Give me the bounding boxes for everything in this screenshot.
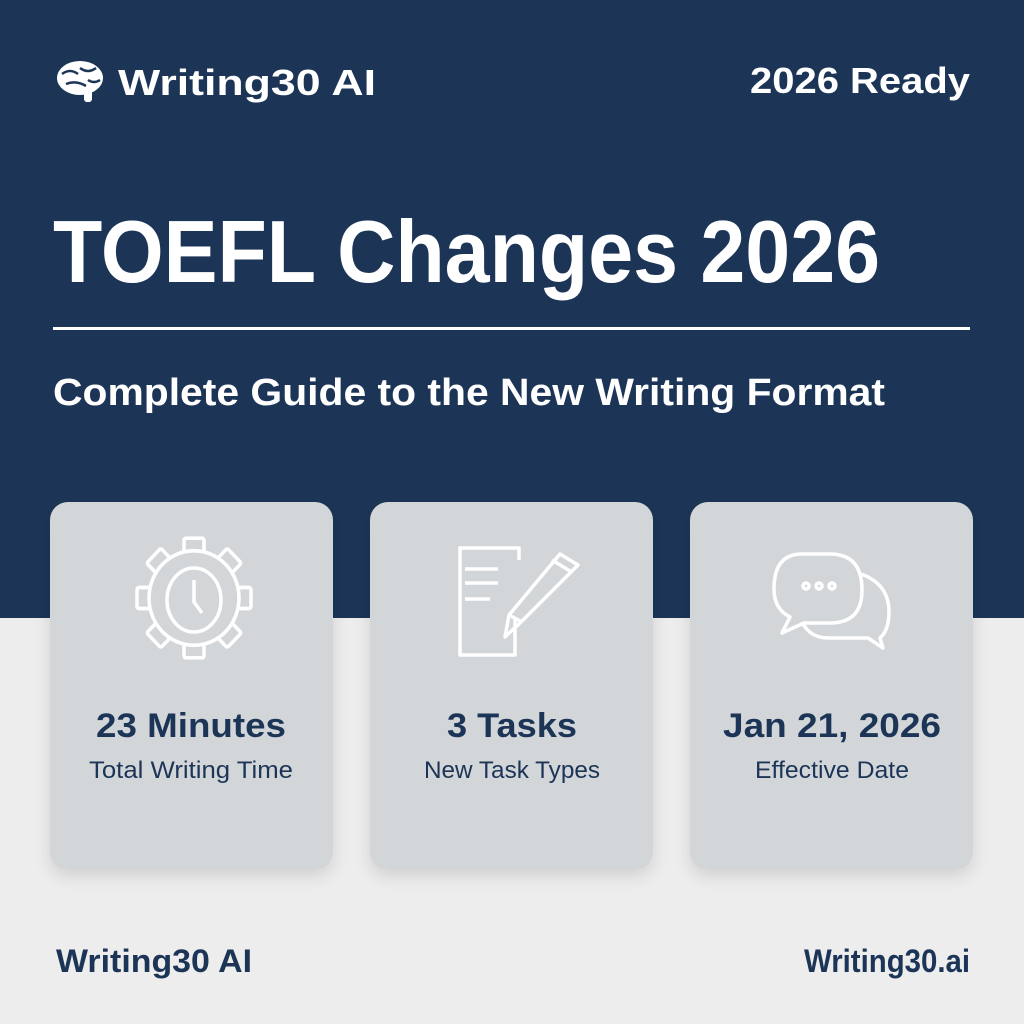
card: 3 tasks [370,502,653,870]
label: Total Writing Time [89,757,293,784]
logo [57,61,376,103]
title: TOEFL Changes 2026 [53,202,880,301]
subtitle: Complete Guide to the New Writing Format [53,372,885,414]
brand name: Writing30 AI [118,62,376,103]
stat: 23 Minutes [96,707,286,745]
icon: chat bubbles [774,554,889,648]
badge: 2026 Ready: 2026 Ready [750,60,970,101]
stat: Jan 21, 2026 [723,707,941,745]
footer brand: Writing30 AI [56,943,252,979]
icon: brain [57,61,103,102]
icon: gear clock [137,538,251,658]
icon: document with pencil [460,548,578,655]
stat: 3 Tasks [447,707,577,745]
label: New Task Types [424,757,600,784]
footer url: Writing30.ai [804,943,970,979]
header background [0,0,1024,618]
card: date [690,502,973,870]
label: Effective Date [755,757,909,784]
card: 23 minutes [50,502,333,870]
bottom background [0,618,1024,1024]
